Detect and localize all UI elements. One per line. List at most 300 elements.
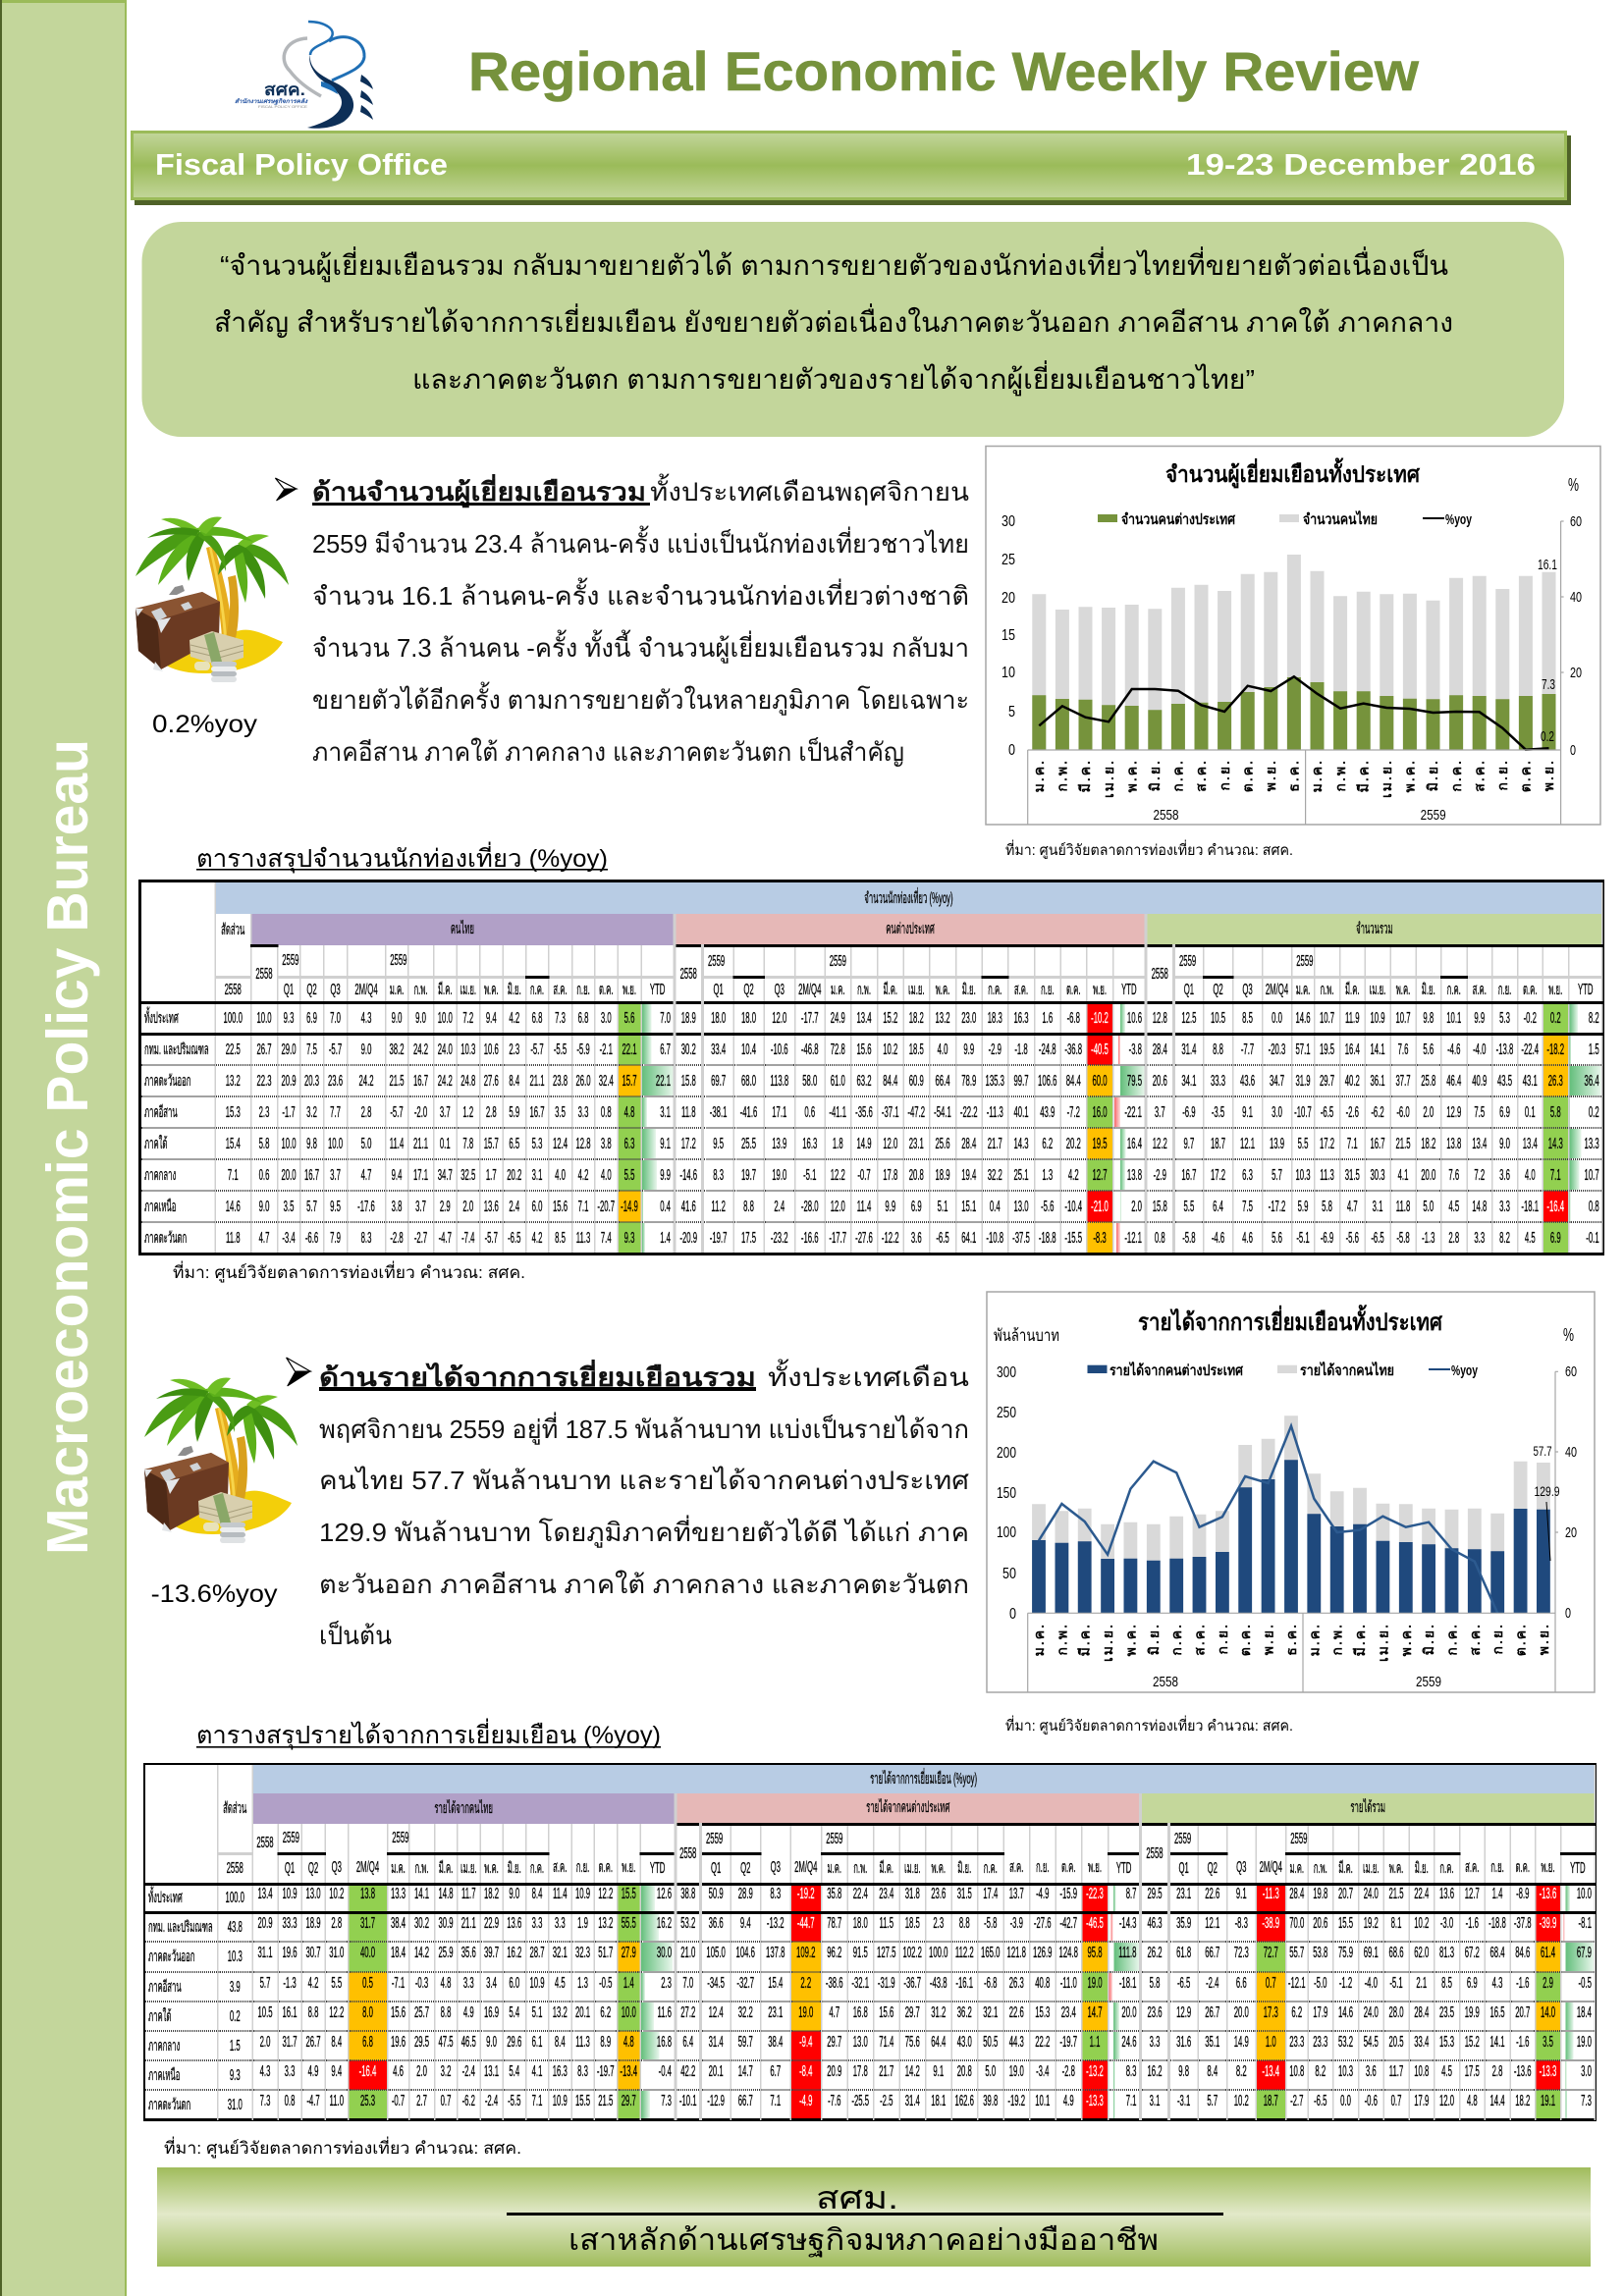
row: North: 5.9	[1298, 1198, 1308, 1215]
row: West: 11.3	[576, 1229, 590, 1247]
grey stacked bars	[1032, 555, 1555, 750]
table 2 year row: 2559	[826, 1830, 842, 1847]
left axis labels: 100	[997, 1524, 1016, 1541]
row: East: 51.7	[598, 1945, 613, 1961]
row: South: 16.7	[1370, 1135, 1385, 1152]
row: West: ภาคตะวันตก	[144, 1229, 187, 1247]
year labels	[1153, 1674, 1441, 1690]
table 1 period row: พ.ค.	[1396, 982, 1410, 997]
row: Northeast: 0.2	[1589, 1103, 1599, 1121]
text block: visitors: 2559 มีจำนวน 23.4 ล้านคน-ครั้ง แบ่งเป็นนักท่องเที่ยวชาวไทย	[312, 525, 969, 559]
row: Northeast: -16.1	[955, 1975, 973, 1991]
table 1 year row	[141, 945, 1602, 977]
row: Northeast: 5.7	[260, 1975, 270, 1991]
row: North: 3.7	[415, 1198, 426, 1215]
row: Bangkok and vicinity: 14.1	[1370, 1041, 1385, 1058]
row: West: 4.6	[1242, 1229, 1253, 1247]
row: East: 33.3	[1211, 1072, 1225, 1090]
row: Bangkok and vicinity: -27.6	[1034, 1915, 1052, 1932]
row: South: 23.5	[1439, 2004, 1454, 2020]
row: Central: 19.6	[391, 2034, 406, 2050]
row: Northeast: 3.0	[1272, 1103, 1282, 1121]
row: Northeast: -6.0	[1396, 1103, 1410, 1121]
row: East: 79.5	[1127, 1072, 1142, 1090]
month labels: ต.ค.	[1518, 759, 1534, 792]
row: West	[144, 1222, 1599, 1253]
table 1 period row: Q3	[775, 982, 785, 997]
heading: table 1: ตารางสรุปจำนวนนักท่องเที่ยว (%yoy)	[196, 841, 608, 874]
row: Central: 43.0	[957, 2034, 972, 2050]
row: North: ภาคเหนือ	[144, 1198, 176, 1215]
table 2 period row: มี.ค.	[1338, 1860, 1353, 1877]
table 2 year row: 2559	[392, 1830, 408, 1846]
text block: visitors: ภาคอีสาน ภาคใต้ ภาคกลาง และภาคตะวันตก เป็นสำคัญ	[312, 736, 904, 767]
row: Northeast: 4.8	[441, 1975, 451, 1991]
row: South: 8.8	[308, 2004, 318, 2020]
row: South: 25.6	[935, 1135, 950, 1152]
row: Bangkok and vicinity: 5.6	[1423, 1041, 1434, 1058]
row: Central: -1.6	[1516, 2034, 1529, 2050]
row: whole country: 23.1	[1176, 1886, 1191, 1902]
row: Bangkok and vicinity: 15.5	[1338, 1915, 1353, 1932]
row: West: 18.2	[1515, 2093, 1530, 2109]
row: Northeast: 7.5	[1474, 1103, 1485, 1121]
row: Bangkok and vicinity: 7.5	[306, 1041, 317, 1058]
row: West: 66.7	[738, 2093, 753, 2109]
row: West: 0.7	[1391, 2093, 1401, 2109]
row: Central: 1.0	[1266, 2034, 1276, 2050]
row: South: 25.5	[741, 1135, 756, 1152]
table 2 period row: YTD	[1570, 1860, 1586, 1877]
row: North: 11.4	[857, 1198, 871, 1215]
row: Central: 4.8	[623, 2034, 634, 2050]
row: South: 17.2	[1320, 1135, 1334, 1152]
left sidebar	[0, 0, 127, 2296]
row: West: 7.3	[260, 2093, 270, 2109]
row: Central: 20.0	[281, 1166, 297, 1184]
row: West: 7.1	[770, 2093, 781, 2109]
table 1 period row: YTD	[1121, 982, 1137, 997]
row: West: 4.2	[532, 1229, 542, 1247]
row: Northeast: -1.3	[283, 1975, 297, 1991]
row: Central: 20.8	[909, 1166, 924, 1184]
table 2 year row	[256, 1830, 1308, 1862]
left axis labels: 50	[1002, 1566, 1016, 1582]
row: Central: 13.0	[853, 2034, 868, 2050]
row: Bangkok and vicinity: 43.8	[228, 1919, 243, 1936]
row: whole country: 9.0	[509, 1886, 519, 1902]
row: Northeast: 5.5	[331, 1975, 342, 1991]
row: West: 0.7	[441, 2093, 451, 2109]
row: South: 28.4	[1414, 2004, 1429, 2020]
row: West: -8.3	[1093, 1229, 1107, 1247]
row: North: 4.5	[1448, 1198, 1459, 1215]
row: whole country: 8.4	[532, 1886, 542, 1902]
chart source 1: ที่มา: ศูนย์วิจัยตลาดการท่องเที่ยว คำนวณ: สศค.	[1005, 839, 1293, 859]
row: Central: 7.1	[228, 1166, 239, 1184]
table 1 period row: Q2	[743, 982, 754, 997]
table 2 period row: ส.ค.	[553, 1859, 567, 1876]
row: East: 23.6	[328, 1072, 343, 1090]
row: West: -18.8	[1039, 1229, 1056, 1247]
row: West: 7.3	[1581, 2093, 1592, 2109]
text block: revenue	[319, 1359, 970, 1650]
row: East: 63.2	[856, 1072, 872, 1090]
row: whole country: 10.0	[438, 1009, 453, 1027]
row: West: -5.1	[1296, 1229, 1310, 1247]
table 2 period row: ก.ย.	[1036, 1859, 1050, 1876]
row: North: 0.4	[660, 1198, 671, 1215]
row: West: 39.8	[983, 2093, 998, 2109]
row: Northeast: 10.9	[529, 1975, 545, 1991]
legend: จำนวนคนต่างประเทศ	[1121, 511, 1235, 528]
row: West: -16.6	[801, 1229, 819, 1247]
table 2 title row: 2558	[1146, 1845, 1164, 1862]
row: North: 19.0	[1009, 2063, 1024, 2079]
row: Northeast: -36.7	[903, 1975, 921, 1991]
row: North: 14.6	[226, 1198, 241, 1215]
row: whole country: 13.0	[305, 1886, 321, 1902]
row: West	[145, 2090, 1595, 2119]
row: North: 4.1	[532, 2063, 542, 2079]
row: whole country: -13.6	[1540, 1886, 1556, 1902]
month labels: พ.ย.	[1261, 1623, 1276, 1655]
row: South: 21.5	[1395, 1135, 1411, 1152]
row: South: 18.7	[1211, 1135, 1225, 1152]
row: East: 137.8	[766, 1945, 785, 1961]
table 2 period row: ต.ค.	[1061, 1859, 1076, 1876]
row: North: 12.0	[831, 1198, 845, 1215]
row: West: -4.7	[306, 2093, 320, 2109]
row: South: 13.4	[1523, 1135, 1538, 1152]
row: West: 0.8	[285, 2093, 295, 2109]
row: West: ภาคตะวันตก	[148, 2097, 190, 2112]
row: Central: 71.4	[879, 2034, 893, 2050]
table 2 period row: ต.ค.	[598, 1859, 613, 1876]
row: whole country: 12.7	[1465, 1886, 1480, 1902]
row: Bangkok and vicinity: กทม. และปริมณฑล	[144, 1041, 209, 1058]
row: West: 18.1	[931, 2093, 946, 2109]
row: Northeast: -2.0	[414, 1103, 427, 1121]
table 1 year row: 2559	[390, 952, 406, 969]
data labels	[1534, 1443, 1560, 1499]
row: North: 20.9	[827, 2063, 841, 2079]
row: South: 12.0	[883, 1135, 897, 1152]
row: Central: 15.3	[1439, 2034, 1454, 2050]
row: North: 8.3	[577, 2063, 588, 2079]
row: Central: 20.0	[1421, 1166, 1435, 1184]
row: North: 9.0	[259, 1198, 269, 1215]
row: Bangkok and vicinity: -37.8	[1514, 1915, 1532, 1932]
row: South: 32.1	[983, 2004, 998, 2020]
table 2 title row: สัดส่วน	[223, 1800, 246, 1817]
row: Northeast: 1.3	[577, 1975, 588, 1991]
left axis labels: 5	[1008, 704, 1015, 721]
row: whole country: 12.5	[1181, 1009, 1196, 1027]
row: West: 2.8	[1448, 1229, 1459, 1247]
month labels: พ.ค.	[1398, 1623, 1414, 1656]
row: West: -5.8	[1396, 1229, 1410, 1247]
row: East: 68.6	[1388, 1945, 1404, 1961]
month labels: ม.ค.	[1031, 1623, 1047, 1656]
row: North: -0.4	[659, 2063, 672, 2079]
data labels	[1538, 557, 1557, 745]
month labels: มี.ค.	[1355, 759, 1371, 792]
row: North: 15.8	[1153, 1198, 1167, 1215]
row: Northeast: -18.1	[1119, 1975, 1137, 1991]
table 1 year row: 2558	[1152, 966, 1168, 982]
row: whole country: 0.0	[1272, 1009, 1282, 1027]
row: West: -27.6	[855, 1229, 873, 1247]
row: Bangkok and vicinity: 28.4	[1153, 1041, 1167, 1058]
row: Central: -0.7	[857, 1166, 871, 1184]
row: whole country: 9.8	[1423, 1009, 1434, 1027]
left axis labels: 25	[1001, 552, 1015, 568]
row: Bangkok and vicinity: 19.2	[1364, 1915, 1379, 1932]
row: Bangkok and vicinity: 21.1	[461, 1915, 476, 1932]
row: West: -3.4	[282, 1229, 296, 1247]
row: East: 66.4	[935, 1072, 950, 1090]
row: Central: 9.9	[660, 1166, 671, 1184]
row: whole country: -17.7	[801, 1009, 819, 1027]
row: Bangkok and vicinity: 30.9	[438, 1915, 454, 1932]
row: Northeast: 0.8	[601, 1103, 612, 1121]
row: Central: 4.1	[1398, 1166, 1408, 1184]
table 2 period row: ก.พ.	[414, 1860, 429, 1877]
row: whole country: 10.7	[1320, 1009, 1334, 1027]
row: Central: 19.0	[772, 1166, 786, 1184]
row: Northeast: 11.8	[681, 1103, 696, 1121]
text block: visitors: จำนวน 16.1 ล้านคน-ครั้ง และจำนวนนักท่องเที่ยวต่างชาติ	[312, 577, 969, 611]
row: whole country: -22.3	[1086, 1886, 1104, 1902]
right axis labels: 60	[1570, 513, 1582, 530]
row: Central: ภาคกลาง	[144, 1166, 176, 1184]
month labels: ก.พ.	[1054, 1623, 1069, 1655]
row: whole country: 11.4	[553, 1886, 568, 1902]
row: South: 23.6	[1147, 2004, 1163, 2020]
row: West: 8.2	[1499, 1229, 1510, 1247]
year labels: 2559	[1421, 807, 1446, 824]
row: East: 75.9	[1338, 1945, 1353, 1961]
table 1 period row: มิ.ย.	[962, 982, 976, 997]
row: South: 32.2	[738, 2004, 753, 2020]
row: South: 29.7	[905, 2004, 920, 2020]
row: South: 13.2	[553, 2004, 568, 2020]
table 1 period row: ก.พ.	[1320, 982, 1334, 997]
row: North: 10.8	[1289, 2063, 1304, 2079]
row: whole country: 6.8	[532, 1009, 542, 1027]
row: Bangkok and vicinity: 4.0	[938, 1041, 947, 1058]
month labels: ส.ค.	[1192, 1623, 1208, 1656]
row: East: 27.9	[622, 1945, 636, 1961]
row: whole country: 13.8	[360, 1886, 375, 1902]
right axis labels: 40	[1570, 589, 1582, 606]
row: whole country: 18.3	[988, 1009, 1002, 1027]
row: East: 20.9	[281, 1072, 297, 1090]
table 2: tourism revenue	[143, 1763, 1597, 2121]
month labels: ธ.ค.	[1283, 1623, 1299, 1656]
table 1 period row: มี.ค.	[1345, 982, 1360, 997]
month labels: ต.ค.	[1239, 759, 1255, 792]
row: Bangkok and vicinity: 16.4	[1345, 1041, 1360, 1058]
row: East: 32.3	[575, 1945, 590, 1961]
row: Northeast: 19.0	[1087, 1975, 1103, 1991]
row: Bangkok and vicinity: 8.8	[959, 1915, 970, 1932]
row: whole country: 12.0	[772, 1009, 786, 1027]
table 2 period row: Q1	[1178, 1860, 1189, 1877]
table 1 year row: 2559	[1179, 952, 1196, 970]
text block: revenue: พฤศจิกายน 2559 อยู่ที่ 187.5 พันล้านบาท แบ่งเป็นรายได้จาก	[319, 1412, 969, 1445]
table 1 title row	[144, 882, 1601, 1253]
row: North: 9.3	[230, 2067, 241, 2083]
table 1 group headers: คนต่างประเทศ	[886, 921, 935, 937]
row: whole country: 23.4	[879, 1886, 893, 1902]
row: Central: 1.3	[1042, 1166, 1053, 1184]
row: Northeast: 12.9	[1446, 1103, 1461, 1121]
table 2 period row: Q2	[308, 1860, 318, 1877]
row: Northeast: 7.7	[330, 1103, 341, 1121]
row: Bangkok and vicinity: -2.9	[989, 1041, 1001, 1058]
row: East: 53.8	[1313, 1945, 1327, 1961]
row: East: 124.8	[1059, 1945, 1078, 1961]
row: whole country: 28.9	[738, 1886, 753, 1902]
row: Bangkok and vicinity: กทม. และปริมณฑล	[148, 1919, 213, 1936]
text block: visitors: ทั้งประเทศเดือนพฤศจิกายน	[650, 473, 969, 507]
row: North: 14.2	[905, 2063, 920, 2079]
row: Central: 6.8	[362, 2034, 373, 2050]
row: Central: 16.7	[304, 1166, 319, 1184]
row: Bangkok and vicinity: 33.3	[282, 1915, 298, 1932]
row: North: 5.8	[1322, 1198, 1332, 1215]
row: South: 4.9	[463, 2004, 474, 2020]
row: West: 7.9	[330, 1229, 341, 1247]
table 1 period row: ส.ค.	[1014, 982, 1028, 997]
row: Central: 22.2	[1035, 2034, 1050, 2050]
row: South: 19.0	[798, 2004, 813, 2020]
row: whole country: 7.3	[555, 1009, 566, 1027]
row: North: 9.5	[330, 1198, 341, 1215]
row: whole country: 18.0	[741, 1009, 756, 1027]
row: Bangkok and vicinity: -3.0	[1440, 1915, 1453, 1932]
axes frame	[1028, 521, 1564, 825]
row: North: 2.9	[440, 1198, 451, 1215]
row: East: 21.5	[389, 1072, 405, 1090]
row: whole country: 10.9	[575, 1886, 590, 1902]
left axis labels: 20	[1001, 590, 1015, 607]
row: Northeast: 2.9	[1543, 1975, 1553, 1991]
row: whole country: 9.0	[392, 1009, 402, 1027]
row: North: ภาคเหนือ	[148, 2067, 180, 2083]
row: West: -17.7	[829, 1229, 846, 1247]
row: Bangkok and vicinity: -8.1	[1579, 1915, 1592, 1932]
row: South: 20.0	[1234, 2004, 1249, 2020]
row: Bangkok and vicinity	[141, 1034, 1602, 1065]
row: South: 16.3	[802, 1135, 817, 1152]
row: North: 4.3	[260, 2063, 270, 2079]
row: North: 2.4	[774, 1198, 785, 1215]
month labels: ก.ย.	[1489, 1623, 1505, 1654]
row: Central: 29.7	[827, 2034, 841, 2050]
row: whole country: 10.1	[1446, 1009, 1461, 1027]
row: East: 81.3	[1439, 1945, 1454, 1961]
row: East: 43.1	[1523, 1072, 1538, 1090]
row: Northeast: 4.2	[308, 1975, 318, 1991]
row: Northeast: 6.0	[509, 1975, 519, 1991]
row: North: 13.6	[484, 1198, 499, 1215]
row: Northeast: -0.5	[1579, 1975, 1592, 1991]
row: East: 21.1	[529, 1072, 545, 1090]
left axis labels: 15	[1001, 627, 1015, 644]
table 2 year row: 2559	[283, 1830, 299, 1846]
quote panel: และภาคตะวันตก ตามการขยายตัวของรายได้จากผู้เยี่ยมเยือนชาวไทย”	[412, 360, 1255, 397]
row: Northeast: 3.9	[230, 1979, 241, 1995]
text block: visitors: ขยายตัวได้อีกครั้ง ตามการขยายตัวในหลายภูมิภาค โดยเฉพาะ	[312, 681, 969, 716]
row: South: 7.8	[462, 1135, 473, 1152]
table 1 period row: ก.พ.	[413, 982, 428, 997]
row: Bangkok and vicinity: 72.8	[831, 1041, 845, 1058]
row: whole country: 8.2	[1589, 1009, 1599, 1027]
row: Bangkok and vicinity: 13.6	[507, 1915, 521, 1932]
left axis labels: 30	[1001, 513, 1015, 530]
row: South: 5.3	[532, 1135, 542, 1152]
row: Bangkok and vicinity: -5.9	[576, 1041, 590, 1058]
row: South: 16.1	[282, 2004, 298, 2020]
month labels: เม.ย.	[1101, 759, 1116, 798]
row: South: 12.4	[709, 2004, 724, 2020]
row: Central: 23.3	[1289, 2034, 1304, 2050]
row: whole country: 3.0	[601, 1009, 612, 1027]
table 1 year row: 2559	[830, 952, 846, 970]
icon: palm tree and suitcase 2	[144, 1378, 298, 1543]
row: South: 20.0	[1121, 2004, 1137, 2020]
row: Bangkok and vicinity: 22.9	[484, 1915, 499, 1932]
quote panel	[141, 222, 1564, 437]
row: North: 2.8	[1492, 2063, 1502, 2079]
row: Central: 10.3	[1295, 1166, 1311, 1184]
row: Northeast: 15.4	[768, 1975, 783, 1991]
row: Central: 1.7	[486, 1166, 497, 1184]
row: Bangkok and vicinity: 57.1	[1295, 1041, 1311, 1058]
row: Central: 5.7	[1272, 1166, 1282, 1184]
table 1 group headers: คนไทย	[451, 921, 474, 937]
row: Bangkok and vicinity: 11.5	[879, 1915, 893, 1932]
year labels: 2559	[1416, 1674, 1441, 1690]
row: whole country	[145, 1884, 1595, 1912]
row: West: 3.6	[911, 1229, 922, 1247]
row: Bangkok and vicinity	[145, 1912, 1595, 1942]
row: North: 8.4	[1207, 2063, 1218, 2079]
row: West: -10.1	[679, 2093, 697, 2109]
footer slogan: เสาหลักด้านเศรษฐกิจมหภาคอย่างมืออาชีพ	[568, 2224, 1159, 2258]
row: West: -0.6	[1365, 2093, 1378, 2109]
month labels: ธ.ค.	[1286, 759, 1302, 792]
row: Northeast: -2.6	[1346, 1103, 1359, 1121]
row: West: 11.0	[329, 2093, 344, 2109]
row: Central: -9.4	[799, 2034, 812, 2050]
row: West: -6.5	[936, 1229, 949, 1247]
table 2 group headers: รายได้รวม	[1350, 1799, 1385, 1816]
row: North: 13.0	[1013, 1198, 1029, 1215]
row: East: 36.1	[1370, 1072, 1385, 1090]
row: South: 10.0	[281, 1135, 297, 1152]
row: Bangkok and vicinity: 24.0	[438, 1041, 453, 1058]
row: East: 13.2	[226, 1072, 241, 1090]
row: whole country: 23.0	[961, 1009, 976, 1027]
row: Bangkok and vicinity: 9.4	[740, 1915, 751, 1932]
row: whole country: 13.4	[257, 1886, 273, 1902]
row: Central: ภาคกลาง	[148, 2038, 180, 2054]
row: Central: 0.6	[259, 1166, 269, 1184]
